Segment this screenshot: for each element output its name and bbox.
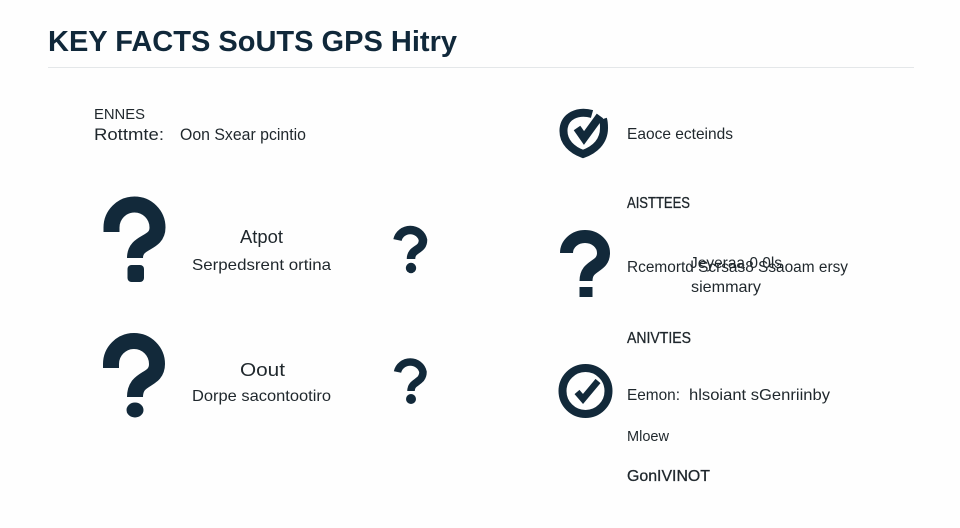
icon: large question mark, row 1 <box>112 205 158 282</box>
fact text: row 1 <box>192 227 331 274</box>
fact text: row 2: Dorpe sacontootiro <box>192 388 331 405</box>
heading: AISTTEES: AISTTEES <box>627 195 690 212</box>
fact text: row 1: Atpot <box>240 227 283 247</box>
icon: small question mark, row 1 <box>398 230 423 273</box>
overlapping summary text <box>627 255 848 296</box>
icon: large question mark, row 2 <box>111 341 157 418</box>
fact text: row 2: Oout <box>240 360 285 380</box>
intro text block: Rottmte: <box>94 125 164 144</box>
overlapping summary text: Jeyeraa 0 0ls <box>690 255 782 272</box>
intro text block: ENNES <box>94 106 145 123</box>
fact text: shield: Eaoce ecteinds <box>627 126 733 143</box>
fact text: row 1: Serpedsrent ortina <box>192 257 331 274</box>
title: KEY FACTS SoUTS GPS Hitry <box>48 26 457 58</box>
fact text: circled check: hlsoiant sGenriinby <box>689 387 830 404</box>
label: Mloew: Mloew <box>627 428 669 445</box>
icon: right question mark <box>566 237 604 297</box>
overlapping summary text: Rcemortd Scrsas8 Ssaoam ersy <box>627 259 848 276</box>
fact text: row 2 <box>192 360 331 405</box>
icon: circled check <box>562 368 608 414</box>
icon: shield with check <box>563 113 604 154</box>
fact text: circled check <box>627 387 830 404</box>
label: GonIVINOT: GonIVINOT <box>627 468 710 485</box>
intro text block: Oon Sxear pcintio <box>180 125 306 144</box>
intro text block <box>94 106 306 144</box>
fact text: circled check: Eemon: <box>627 387 680 404</box>
heading: ANIVTIES: ANIVTIES <box>627 330 691 347</box>
icon: small question mark, row 2 <box>398 362 423 404</box>
overlapping summary text: siemmary <box>691 279 761 296</box>
